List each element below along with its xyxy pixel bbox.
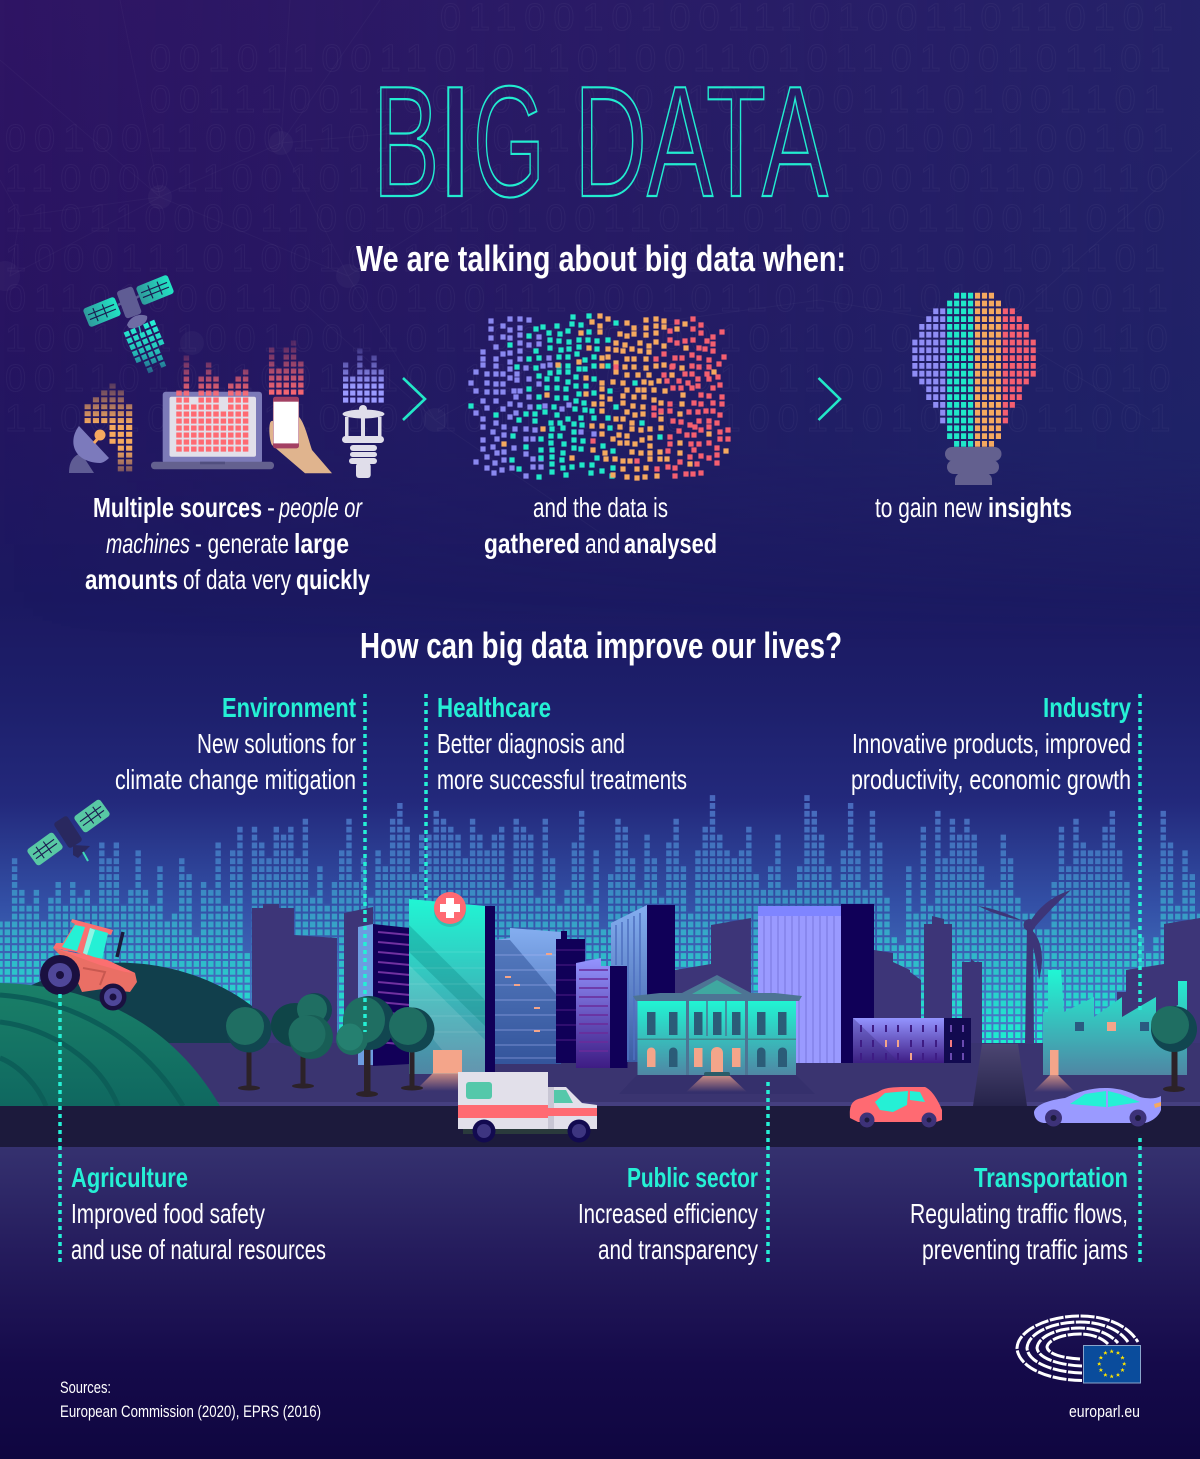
- text: multiple sources: of data very: [183, 564, 291, 595]
- tower with purple stripes: [358, 924, 410, 1066]
- icon: weather station: [342, 348, 384, 478]
- red car: [850, 1087, 942, 1128]
- satellite over city: [26, 799, 111, 866]
- background binary digits: 001110011001011010110010011101001101: [150, 79, 1173, 121]
- background network pattern: [0, 0, 1200, 560]
- heading: how can big data improve our lives: How can big data improve our lives?: [360, 625, 842, 666]
- sources: European Commission (2020), EPRS (2016): [60, 1402, 321, 1421]
- text: multiple sources: Multiple sources: [93, 492, 262, 523]
- blue tower: [611, 905, 675, 1062]
- label: industry: Industry: [1043, 692, 1131, 723]
- label: environment: Environment: [222, 692, 356, 723]
- text: new insights: insights: [988, 492, 1072, 523]
- label: public sector: Public sector: [627, 1162, 758, 1193]
- label: agriculture: and use of natural resources: [71, 1234, 326, 1265]
- label: healthcare: Healthcare: [437, 692, 551, 723]
- text: multiple sources: - generate: [195, 528, 289, 559]
- text: gathered and analysed: gathered: [484, 528, 580, 559]
- tree 3: [336, 996, 395, 1097]
- ground behind the buildings: [0, 1043, 1200, 1102]
- tractor: [40, 919, 137, 1010]
- label: public sector: Increased efficiency: [578, 1198, 758, 1229]
- label: transportation: [910, 1162, 1128, 1265]
- silhouettes of background buildings: [252, 904, 1200, 1060]
- label: agriculture: Improved food safety: [71, 1198, 265, 1229]
- text: new insights: to gain new: [875, 492, 983, 523]
- text: gathered and analysed: and: [585, 528, 620, 559]
- label: industry: [851, 692, 1131, 795]
- skyline data bars: [0, 795, 1200, 1043]
- background binary digits: [5, 0, 1181, 440]
- lavender tower: [758, 904, 874, 1063]
- lower background band: [0, 1147, 1200, 1459]
- title: B: [373, 54, 440, 230]
- background binary digits: 00100110001101010011010010110101001100101: [5, 118, 1181, 160]
- background binary digits: 001011001101011010011010110100101101: [150, 38, 1178, 80]
- chart: scattered data points: [471, 316, 728, 478]
- icon: light bulb: [912, 292, 1036, 485]
- trees: [226, 993, 1197, 1097]
- title: T: [706, 54, 766, 230]
- title: I: [435, 54, 475, 230]
- background binary digits: 11011000011001011010011011010010110011010: [5, 198, 1173, 240]
- tree 2: [271, 993, 333, 1088]
- text: multiple sources: large: [294, 528, 349, 559]
- lavender car: [1034, 1088, 1161, 1126]
- label: public sector: and transparency: [598, 1234, 758, 1265]
- label: transportation: preventing traffic jams: [922, 1234, 1128, 1265]
- background binary digits: 01101000110000100111000101101001011010011: [5, 278, 1176, 320]
- logo: European Parliament: [1017, 1316, 1140, 1383]
- heading: we are talking: We are talking about big data when:: [356, 238, 846, 279]
- label: healthcare: more successful treatments: [437, 764, 687, 795]
- label: transportation: Regulating traffic flows,: [910, 1198, 1128, 1229]
- label: environment: [115, 692, 356, 795]
- website: europarl.eu: [1069, 1402, 1140, 1421]
- icon: radar dish: [69, 384, 132, 473]
- icon: smartphone in hand: [265, 338, 332, 473]
- factory: [1033, 970, 1187, 1092]
- blue striped building: [495, 928, 585, 1064]
- label: public sector: [578, 1162, 758, 1265]
- pavement strip: [218, 1102, 1200, 1106]
- low purple building: [853, 1018, 971, 1063]
- background: [0, 0, 1200, 1102]
- title: G: [473, 54, 545, 230]
- government building: [619, 975, 815, 1094]
- icon: hospital cross badge: [434, 892, 466, 927]
- arrow 1: [403, 378, 425, 420]
- text: multiple sources: [85, 492, 370, 595]
- wind turbine: [978, 890, 1071, 1044]
- path to factory: [973, 1044, 1027, 1106]
- icon: laptop: [151, 350, 274, 469]
- background binary digits: 11001010011010010110101011001101001011001: [5, 398, 1178, 440]
- text: multiple sources: amounts: [85, 564, 178, 595]
- tree 5: [1151, 1006, 1197, 1092]
- text: gathered and analysed: analysed: [624, 528, 717, 559]
- title: [373, 54, 828, 230]
- tree 1: [226, 1007, 272, 1090]
- text: gathered and analysed: and the data is: [533, 492, 668, 523]
- arrow 2: [818, 378, 840, 420]
- label: healthcare: [437, 692, 687, 795]
- label: agriculture: Agriculture: [71, 1162, 188, 1193]
- ambulance: [458, 1072, 597, 1142]
- hospital tower: [409, 899, 495, 1091]
- label: healthcare: Better diagnosis and: [437, 728, 625, 759]
- label: environment: New solutions for: [197, 728, 356, 759]
- text: gathered and analysed: [484, 492, 717, 559]
- icon: satellite with data: [83, 275, 174, 374]
- title: D: [574, 54, 647, 230]
- background binary digits: 10010110010011011001101001011010010110110: [5, 318, 1176, 360]
- text: multiple sources: -: [267, 492, 275, 523]
- back hill: [22, 963, 262, 1060]
- road: [0, 1106, 1200, 1147]
- tree 4: [389, 1007, 434, 1090]
- label: agriculture: [71, 1162, 326, 1265]
- sources: Sources:: [60, 1378, 111, 1397]
- title: A: [647, 54, 713, 230]
- text: multiple sources: quickly: [296, 564, 370, 595]
- text: multiple sources: people or: [278, 492, 363, 523]
- front hill with furrows: [0, 983, 220, 1106]
- sources: [60, 1378, 321, 1421]
- title: A: [762, 54, 828, 230]
- background binary digits: 10001110100101100111010010110101100101101: [5, 238, 1173, 280]
- label: transportation: Transportation: [974, 1162, 1128, 1193]
- purple striped building: [576, 958, 628, 1068]
- background binary digits: 00110101100101001101001101011001011010010: [5, 358, 1178, 400]
- background binary digits: 11000011001011001101010010110100101100110: [5, 158, 1176, 200]
- label: environment: climate change mitigation: [115, 764, 356, 795]
- dotted leader lines: [60, 694, 1140, 1262]
- text: multiple sources: machines: [106, 528, 190, 559]
